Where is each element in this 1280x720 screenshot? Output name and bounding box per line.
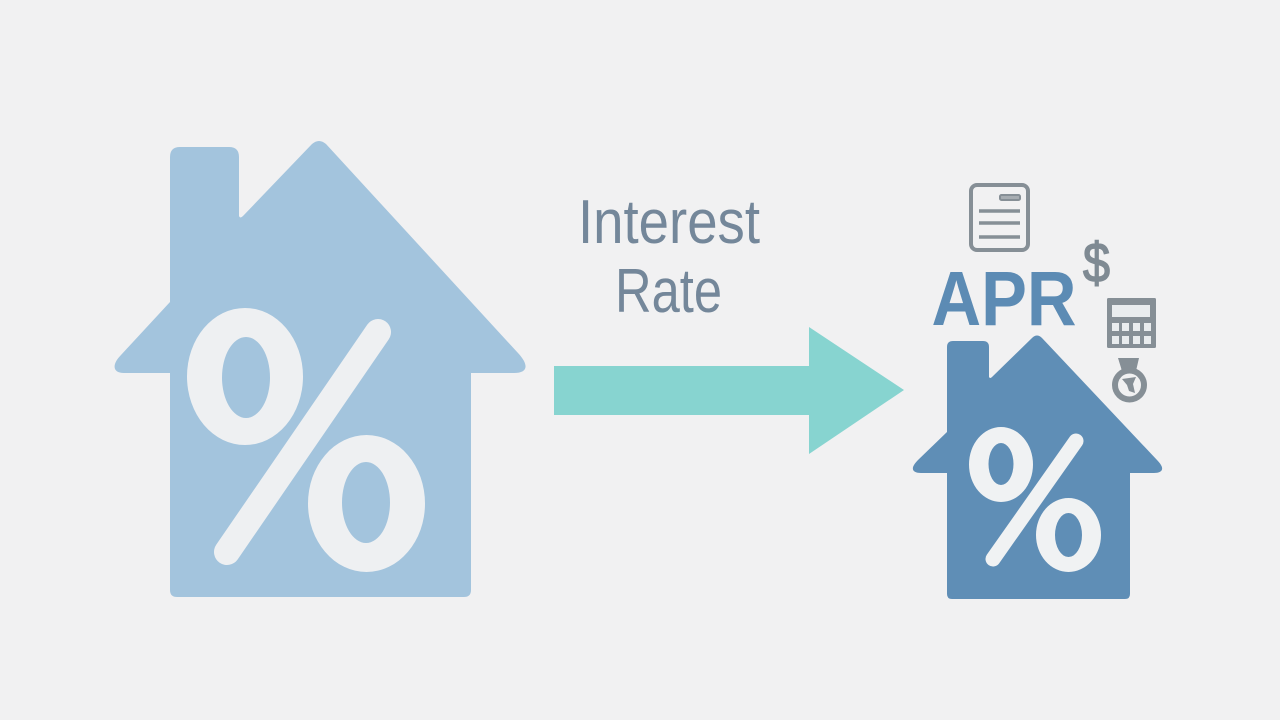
interest rate label: Interest — [578, 188, 760, 257]
APR heading: APR — [932, 256, 1076, 342]
large house shape — [115, 141, 526, 597]
large percent sign — [187, 308, 425, 572]
small house shape — [913, 336, 1162, 599]
small percent sign — [969, 427, 1101, 572]
icon: dollar sign: $ — [1083, 231, 1110, 294]
interest rate label: Rate — [615, 257, 722, 326]
small house with percent sign — [913, 336, 1162, 599]
large house with percent sign — [115, 141, 526, 597]
teal arrow — [554, 327, 904, 454]
interest rate label — [578, 188, 760, 326]
icon: calculator — [1107, 298, 1156, 348]
icon: money bag coin — [1115, 358, 1144, 400]
icon: document — [971, 185, 1028, 250]
